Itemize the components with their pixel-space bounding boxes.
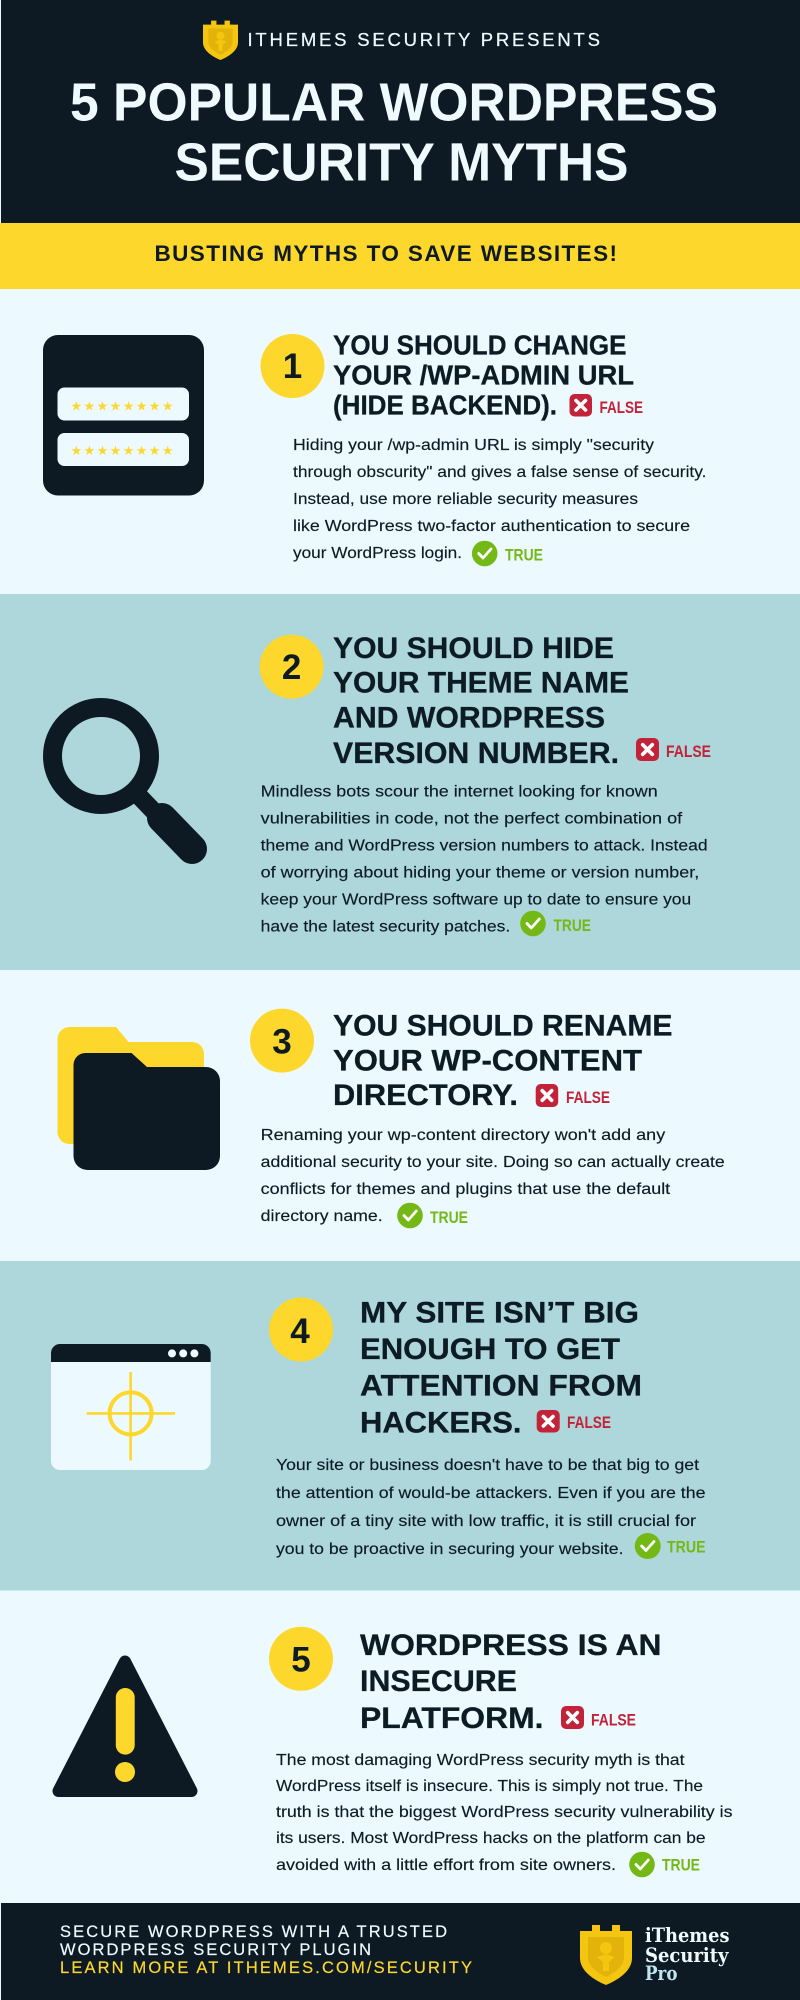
- false badge: FALSE: [567, 1414, 611, 1432]
- icon: password form: ★★★★★★★★: [70, 400, 174, 414]
- heading 1: [333, 330, 634, 420]
- number badge 3: 3: [272, 1022, 292, 1062]
- body text 3: Renaming your wp-content directory won't add any: [261, 1127, 665, 1144]
- footer brand name: Pro: [645, 1961, 678, 1985]
- heading 1: (HIDE BACKEND).: [333, 390, 557, 420]
- heading 3: DIRECTORY.: [333, 1079, 518, 1112]
- heading 3: YOU SHOULD RENAME: [333, 1010, 672, 1042]
- header panel: [1, 0, 800, 223]
- number badge 1: 1: [283, 347, 302, 386]
- panel: myth 1: [0, 289, 800, 594]
- heading 1: YOUR /WP-ADMIN URL: [333, 360, 634, 390]
- body text 4: Your site or business doesn't have to be that big to get: [276, 1457, 700, 1474]
- title: [70, 74, 718, 192]
- body text 3: directory name.: [261, 1208, 383, 1225]
- heading 4: [360, 1296, 642, 1440]
- body text 5: truth is that the biggest WordPress security vulnerability is: [276, 1804, 732, 1821]
- false badge: [636, 738, 711, 761]
- heading 3: [333, 1010, 672, 1112]
- true badge: TRUE: [554, 916, 591, 935]
- body text 1: [293, 437, 706, 562]
- body text 4: the attention of would-be attackers. Even if you are the: [276, 1485, 706, 1502]
- icon: browser target: [51, 1344, 211, 1470]
- heading 2: YOUR THEME NAME: [333, 666, 629, 700]
- heading 2: YOU SHOULD HIDE: [333, 632, 614, 665]
- body text 4: you to be proactive in securing your website.: [276, 1541, 624, 1558]
- body text 1: through obscurity" and gives a false sense of security.: [293, 464, 706, 481]
- footer call to action: SECURE WORDPRESS WITH A TRUSTED: [60, 1923, 447, 1941]
- footer call to action: [60, 1923, 472, 1977]
- true badge: [635, 1533, 706, 1559]
- icon: shield logo: [203, 21, 238, 60]
- panel: myth 2: [0, 594, 800, 970]
- icon: password form: ★★★★★★★★: [70, 444, 174, 459]
- body text 1: your WordPress login.: [293, 545, 462, 562]
- heading 4: HACKERS.: [360, 1406, 522, 1440]
- body text 4: owner of a tiny site with low traffic, it is still crucial for: [276, 1513, 697, 1530]
- icon: folders: [58, 1027, 220, 1170]
- heading 2: VERSION NUMBER.: [333, 737, 619, 770]
- subtitle banner: BUSTING MYTHS TO SAVE WEBSITES!: [154, 241, 617, 266]
- false badge: FALSE: [566, 1089, 610, 1107]
- title: SECURITY MYTHS: [174, 134, 628, 192]
- body text 1: Instead, use more reliable security measures: [293, 491, 638, 508]
- false badge: [561, 1706, 636, 1730]
- false badge: [570, 394, 643, 417]
- heading 3: YOUR WP-CONTENT: [333, 1044, 642, 1078]
- body text 5: [276, 1752, 732, 1874]
- number badge 4: [269, 1298, 333, 1362]
- false badge: FALSE: [591, 1712, 636, 1730]
- number badge 3: [250, 1009, 314, 1073]
- body text 3: conflicts for themes and plugins that use the default: [261, 1181, 671, 1198]
- body text 5: WordPress itself is insecure. This is simply not true. The: [276, 1778, 703, 1795]
- body text 2: [261, 784, 708, 936]
- body text 5: The most damaging WordPress security myth is that: [276, 1752, 685, 1769]
- true badge: [629, 1852, 700, 1877]
- true badge: [397, 1203, 468, 1228]
- true badge: [520, 911, 591, 936]
- footer brand name: Security: [645, 1943, 730, 1967]
- heading 4: MY SITE ISN’T BIG: [360, 1296, 639, 1330]
- true badge: [472, 541, 543, 566]
- panel: myth 4: [0, 1261, 800, 1590]
- panel: myth 3: [0, 970, 800, 1261]
- panel: myth 5: [0, 1590, 800, 1903]
- footer panel: [1, 1903, 800, 2000]
- body text 2: of worrying about hiding your theme or version number,: [261, 864, 699, 882]
- title: 5 POPULAR WORDPRESS: [70, 74, 718, 132]
- false badge: FALSE: [666, 743, 711, 761]
- number badge 5: [269, 1627, 333, 1691]
- presenter line: ITHEMES SECURITY PRESENTS: [248, 29, 600, 50]
- number badge 1: [260, 334, 324, 398]
- true badge: TRUE: [662, 1856, 700, 1874]
- heading 5: PLATFORM.: [360, 1702, 544, 1735]
- body text 3: [261, 1127, 725, 1225]
- heading 1: YOU SHOULD CHANGE: [333, 330, 626, 360]
- number badge 5: 5: [291, 1640, 311, 1680]
- number badge 4: 4: [290, 1312, 310, 1351]
- icon: warning triangle: [58, 1662, 192, 1791]
- heading 2: AND WORDPRESS: [333, 702, 605, 734]
- false badge: FALSE: [600, 399, 643, 417]
- heading 5: INSECURE: [360, 1665, 517, 1698]
- body text 1: like WordPress two-factor authentication to secure: [293, 518, 690, 535]
- heading 4: ATTENTION FROM: [360, 1370, 642, 1402]
- body text 2: theme and WordPress version numbers to attack. Instead: [261, 838, 708, 854]
- heading 2: [333, 632, 629, 770]
- heading 4: ENOUGH TO GET: [360, 1333, 620, 1366]
- number badge 2: [260, 635, 324, 699]
- body text 4: [276, 1457, 706, 1558]
- footer call to action: LEARN MORE AT ITHEMES.COM/SECURITY: [60, 1959, 472, 1977]
- footer brand name: [645, 1923, 730, 1985]
- heading 5: [360, 1629, 662, 1735]
- false badge: [537, 1410, 611, 1432]
- number badge 2: 2: [282, 648, 301, 687]
- body text 1: Hiding your /wp-admin URL is simply "security: [293, 437, 654, 454]
- body text 2: have the latest security patches.: [261, 918, 510, 936]
- icon: magnifying glass: [52, 708, 192, 849]
- footer call to action: WORDPRESS SECURITY PLUGIN: [60, 1941, 371, 1959]
- body text 5: avoided with a little effort from site owners.: [276, 1857, 616, 1874]
- subtitle banner: [0, 223, 800, 289]
- body text 2: keep your WordPress software up to date to ensure you: [261, 892, 691, 908]
- icon: footer shield logo: [580, 1925, 632, 1985]
- true badge: TRUE: [430, 1208, 468, 1227]
- body text 2: vulnerabilities in code, not the perfect combination of: [261, 810, 683, 828]
- footer brand name: iThemes: [645, 1923, 730, 1947]
- heading 5: WORDPRESS IS AN: [360, 1629, 662, 1662]
- body text 3: additional security to your site. Doing so can actually create: [261, 1154, 725, 1171]
- true badge: TRUE: [505, 546, 543, 564]
- true badge: TRUE: [667, 1538, 706, 1556]
- body text 2: Mindless bots scour the internet looking for known: [261, 784, 658, 800]
- false badge: [536, 1084, 610, 1107]
- icon: password form: [43, 335, 204, 496]
- body text 5: its users. Most WordPress hacks on the platform can be: [276, 1830, 706, 1847]
